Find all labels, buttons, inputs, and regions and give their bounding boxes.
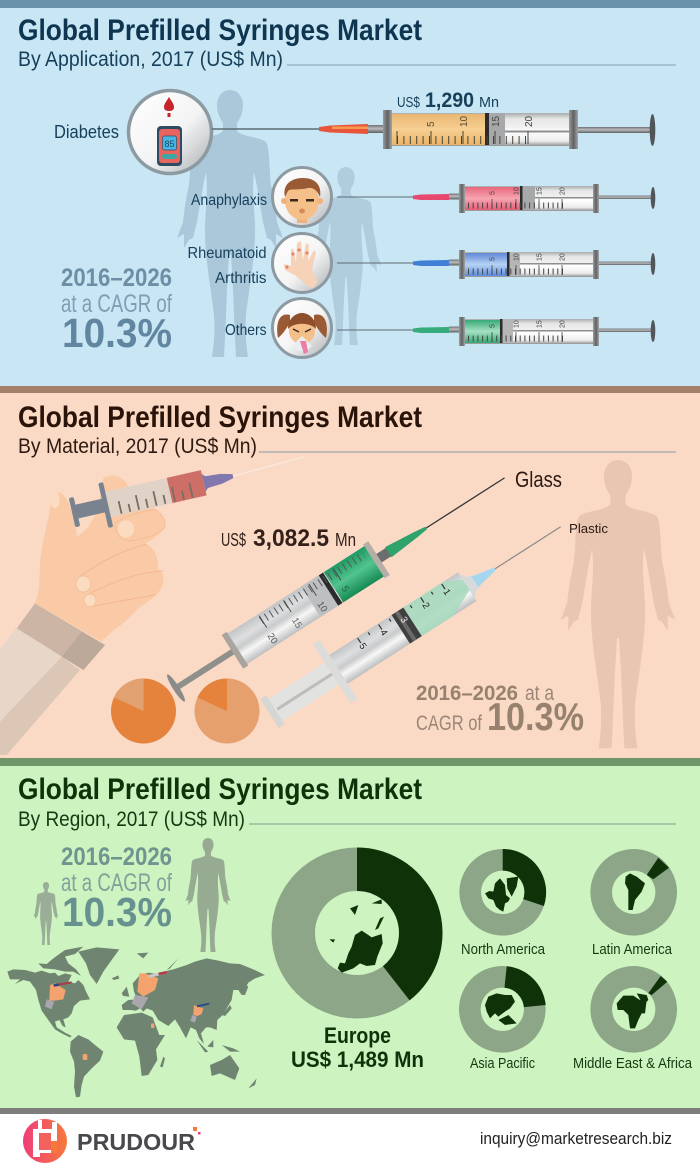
syringe: Diabetes: 20 [524, 115, 535, 127]
silhouette: large person [177, 90, 283, 357]
label: Plastic: Plastic [569, 521, 609, 536]
syringe: plastic: 1 [440, 587, 453, 598]
syringe: Anaphylaxis: 15 [536, 187, 544, 195]
icon: boy face [272, 168, 332, 226]
CAGR callout: application [61, 264, 172, 356]
label: Anaphylaxis: Anaphylaxis [191, 192, 267, 209]
value: US$ 1,290 Mn [397, 89, 499, 112]
footer [23, 1119, 672, 1163]
heading: region: Global Prefilled Syringes Market [18, 773, 422, 806]
syringe: Others: 5 [490, 324, 496, 328]
syringe: Diabetes: 5 [426, 121, 437, 127]
map hand: Europe [132, 971, 167, 1009]
CAGR callout: application: at a CAGR of [61, 290, 172, 318]
syringe: Others: 10 [514, 320, 520, 328]
map hand: North America [45, 981, 72, 1009]
illustration: hand holding syringe [0, 437, 310, 755]
CAGR callout: application: 2016–2026 [61, 264, 172, 292]
icon: arthritic hand [272, 234, 332, 292]
syringe: plastic [251, 497, 580, 743]
CAGR callout: material: 2016–2026 [416, 682, 518, 705]
value: US$ 3,082.5 Mn [221, 525, 356, 552]
heading: application: Global Prefilled Syringes Market [18, 14, 422, 47]
silhouette: large person [185, 838, 231, 952]
CAGR callout: region: 2016–2026 [61, 843, 172, 871]
subheading: application: By Application, 2017 (US$ Mn) [18, 48, 283, 71]
logo accent [193, 1127, 200, 1134]
syringe: Rheumatoid Arthritis: 10 [514, 253, 520, 261]
donut chart: Middle East and Africa [590, 966, 677, 1053]
logo mark [23, 1119, 67, 1163]
syringe: glass: 10 [314, 600, 329, 614]
syringe: glass [163, 461, 515, 706]
subheading: region: By Region, 2017 (US$ Mn) [18, 808, 245, 831]
label: Asia Pacific: Asia Pacific [470, 1055, 535, 1072]
label: Rheumatoid Arthritis: Rheumatoid [188, 245, 266, 262]
syringe: Anaphylaxis: 20 [560, 187, 566, 195]
CAGR callout: region: at a CAGR of [61, 869, 172, 897]
value: US$ 1,290 Mn: Mn [479, 94, 499, 111]
icon: sneezing girl [272, 298, 332, 358]
panel: by material [0, 393, 700, 766]
CAGR callout: region [61, 843, 172, 935]
silhouette: small person [33, 882, 59, 945]
syringe: Anaphylaxis: 5 [490, 191, 496, 195]
pie chart: plastic share [194, 678, 260, 744]
donut chart: Latin America [590, 849, 677, 936]
CAGR callout: material: CAGR of [416, 712, 482, 735]
syringe: Anaphylaxis: 10 [514, 187, 520, 195]
label: Europe value [291, 1023, 424, 1072]
syringe: Others: 15 [536, 320, 544, 328]
panel: by application [0, 0, 700, 393]
value: US$ 1,290 Mn: US$ [397, 94, 421, 111]
CAGR callout: region: 10.3% [62, 889, 172, 935]
subheading: material: By Material, 2017 (US$ Mn) [18, 435, 257, 458]
CAGR callout: material: 10.3% [487, 696, 584, 739]
pie chart: glass share [111, 678, 176, 744]
donut chart: Europe [272, 848, 442, 1018]
heading: material: Global Prefilled Syringes Market [18, 401, 422, 434]
syringe: glass: 20 [265, 631, 280, 646]
logo wordmark: PRUDOUR [77, 1129, 195, 1155]
syringe: Rheumatoid Arthritis: 5 [490, 257, 496, 261]
connector line: Diabetes [212, 128, 320, 130]
label: Diabetes: Diabetes [54, 122, 119, 142]
syringe: glass: 15 [289, 616, 304, 631]
donut chart: Asia Pacific [459, 966, 546, 1053]
CAGR callout: material [416, 682, 584, 739]
label: Latin America: Latin America [592, 941, 673, 958]
value: US$ 3,082.5 Mn: Mn [335, 530, 356, 550]
syringe: Rheumatoid Arthritis: 15 [536, 253, 544, 261]
syringe: glass: 5 [339, 584, 351, 594]
syringe: plastic: 4 [377, 628, 389, 638]
syringe: plastic: 3 [398, 615, 410, 625]
syringe: Diabetes: 10 [459, 115, 470, 127]
map hand: South America [83, 1054, 87, 1060]
label: Europe value: US$ 1,489 Mn [291, 1047, 424, 1072]
silhouette: person [561, 460, 675, 748]
world map [7, 947, 265, 1097]
value: US$ 3,082.5 Mn: US$ [221, 530, 246, 550]
panel: by region [0, 766, 700, 1114]
syringe: Anaphylaxis [413, 184, 655, 213]
icon: glucose meter: 85 [164, 139, 175, 149]
map hand: Asia [190, 1003, 209, 1023]
syringe: Diabetes [319, 110, 655, 149]
connector line: Others [337, 329, 413, 331]
value: US$ 1,290 Mn: 1,290 [425, 89, 474, 112]
connector line: Anaphylaxis [337, 196, 413, 198]
syringe: Others [413, 317, 655, 346]
syringe: Rheumatoid Arthritis [413, 250, 655, 279]
label: Glass: Glass [515, 467, 562, 492]
syringe: Diabetes: 15 [491, 115, 502, 127]
silhouette: small person [311, 167, 381, 345]
label: Rheumatoid Arthritis [188, 245, 266, 287]
CAGR callout: material: at a [525, 682, 554, 705]
value: US$ 3,082.5 Mn: 3,082.5 [253, 525, 329, 552]
syringe: plastic: 5 [356, 641, 368, 652]
icon: glucose meter [128, 90, 212, 174]
CAGR callout: application: 10.3% [62, 310, 172, 356]
syringe: plastic: 2 [419, 601, 432, 611]
contact email: inquiry@marketresearch.biz [480, 1129, 672, 1148]
connector line: Rheumatoid Arthritis [337, 262, 413, 264]
label: North America: North America [461, 941, 546, 958]
map hand: Africa [151, 1023, 154, 1028]
label: Europe value: Europe [324, 1023, 391, 1048]
label: Rheumatoid Arthritis: Arthritis [215, 270, 266, 287]
donut chart: North America [459, 849, 546, 936]
syringe: Rheumatoid Arthritis: 20 [560, 253, 566, 261]
icon: Europe map [329, 899, 384, 973]
syringe: Others: 20 [560, 320, 566, 328]
label: Others: Others [225, 322, 266, 339]
